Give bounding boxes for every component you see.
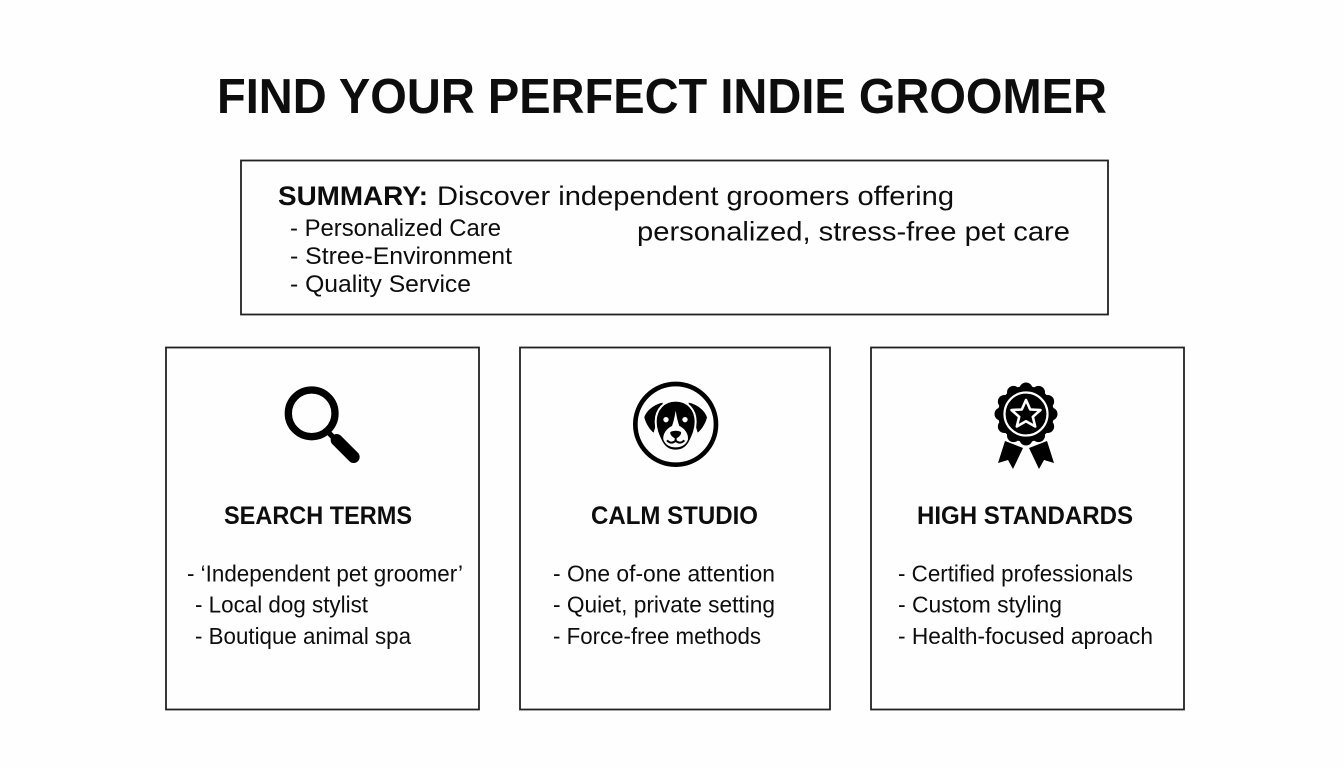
- panel: high standards: [871, 348, 1184, 710]
- search terms list: - Boutique animal spa: [195, 623, 411, 649]
- icon: award rosette: [994, 382, 1058, 469]
- search terms list: [187, 560, 463, 649]
- summary sentence: Discover independent groomers offering: [437, 181, 954, 211]
- calm studio list: [553, 560, 775, 649]
- summary sentence: [437, 181, 1070, 246]
- search terms list: - Local dog stylist: [195, 592, 369, 618]
- calm studio list: - One of-one attention: [553, 560, 775, 586]
- high standards list: - Certified professionals: [898, 560, 1133, 586]
- heading: search terms: SEARCH TERMS: [224, 502, 412, 530]
- title: FIND YOUR PERFECT INDIE GROOMER: [217, 69, 1107, 124]
- icon: dog in circle: [635, 384, 716, 465]
- summary sentence: personalized, stress-free pet care: [637, 216, 1070, 246]
- high standards list: - Health-focused aproach: [898, 623, 1153, 649]
- summary heading: SUMMARY:: [278, 181, 428, 211]
- calm studio list: - Quiet, private setting: [553, 592, 775, 618]
- panel: summary: [241, 160, 1108, 314]
- heading: calm studio: CALM STUDIO: [591, 502, 758, 530]
- icon: magnifying glass: [288, 390, 354, 457]
- heading: high standards: HIGH STANDARDS: [917, 502, 1133, 530]
- summary list: - Personalized Care: [290, 215, 501, 242]
- high standards list: [898, 560, 1153, 649]
- summary list: [290, 215, 512, 298]
- panel: search terms: [166, 348, 479, 710]
- calm studio list: - Force-free methods: [553, 623, 761, 649]
- high standards list: - Custom styling: [898, 592, 1062, 618]
- search terms list: - ‘Independent pet groomer’: [187, 560, 463, 586]
- summary list: - Quality Service: [290, 271, 471, 298]
- panel: calm studio: [520, 348, 830, 710]
- summary list: - Stree-Environment: [290, 243, 512, 270]
